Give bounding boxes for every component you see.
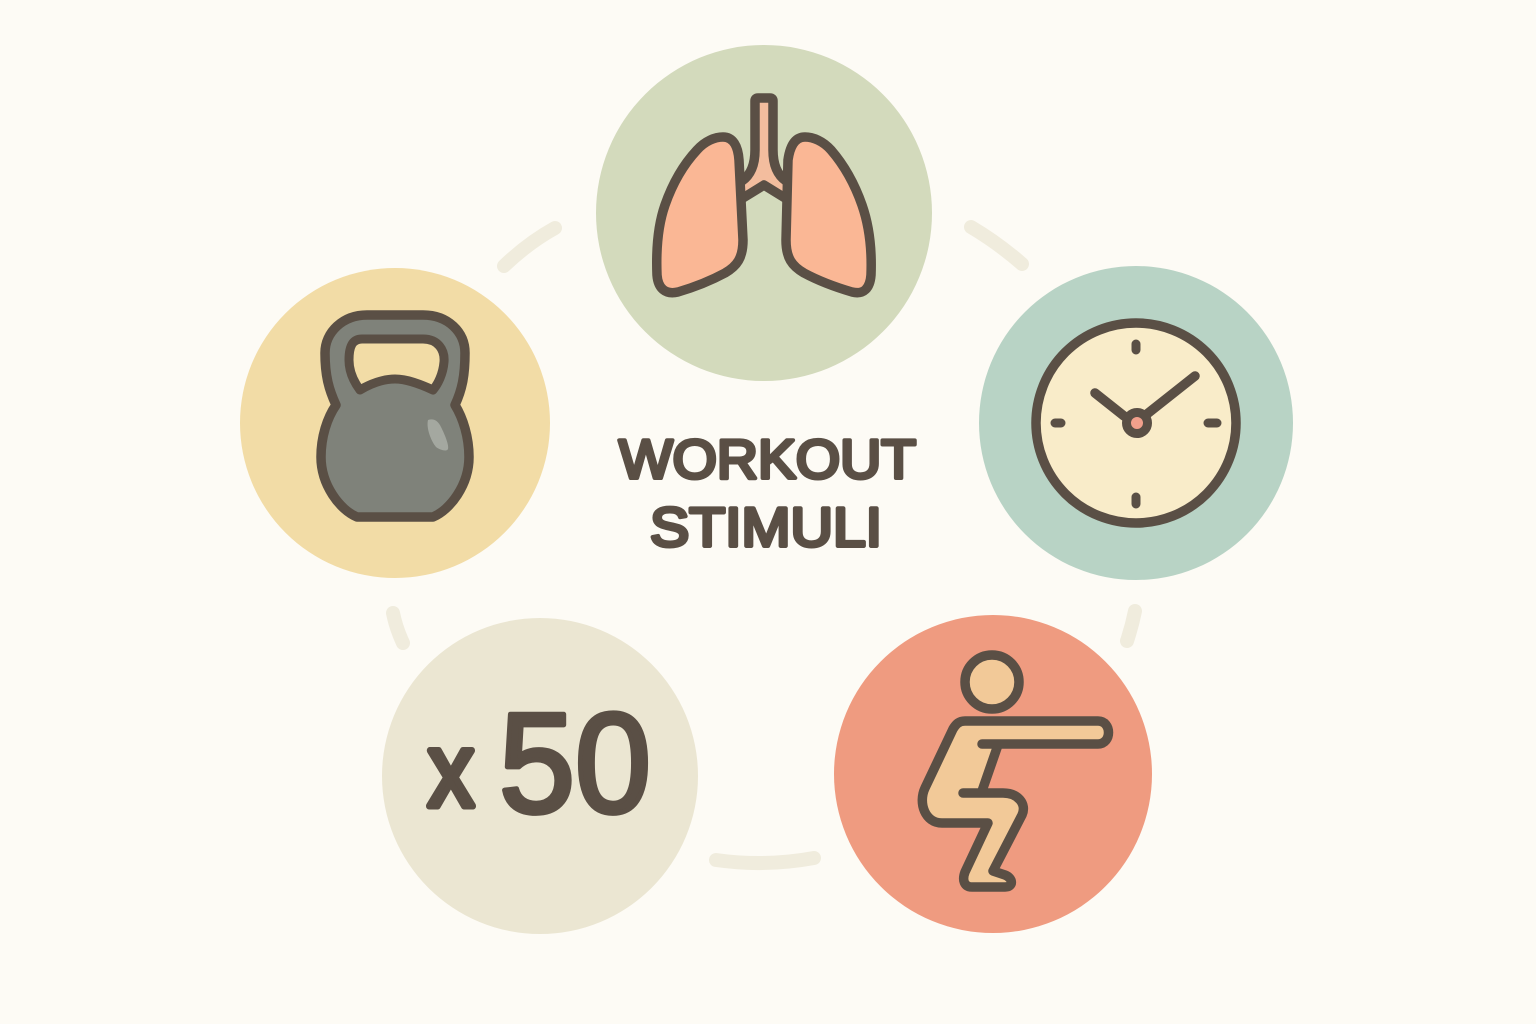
- panel: repetitions: [382, 618, 698, 934]
- icon: clock hands: [1095, 376, 1195, 416]
- icon: kettlebell body: [321, 315, 469, 517]
- panel: squat: [834, 615, 1152, 933]
- panel: lungs: [596, 45, 932, 381]
- icon: clock face: [1036, 323, 1236, 523]
- icon: kettlebell handle: [349, 339, 444, 390]
- icon: trachea: [743, 98, 786, 199]
- icon: body fill: [922, 721, 1108, 887]
- icon: head: [965, 655, 1019, 709]
- title: [619, 428, 916, 558]
- icon: kettlebell highlight: [428, 419, 448, 450]
- number 50: 50: [499, 684, 651, 843]
- title line 2: STIMULI: [650, 496, 882, 558]
- title line 1: WORKOUT: [619, 428, 916, 490]
- icon: clock hub: [1126, 412, 1148, 434]
- icon: clock ticks: [1055, 344, 1217, 504]
- multiplier x: x: [428, 712, 474, 829]
- icon: trachea outline: [742, 98, 786, 198]
- icon: right lung: [786, 137, 871, 293]
- panel: kettlebell: [240, 268, 550, 578]
- icon: body outline: [922, 721, 1108, 887]
- panel: clock: [979, 266, 1293, 580]
- icon: left lung: [657, 137, 743, 293]
